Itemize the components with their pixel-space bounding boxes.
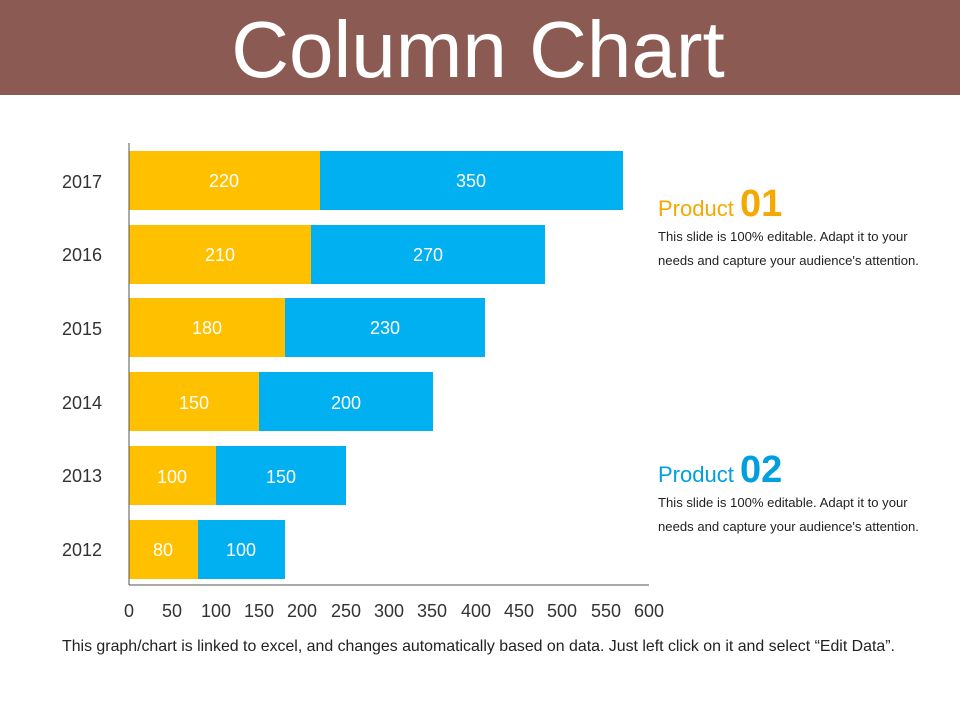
x axis labels: 100 <box>201 601 231 621</box>
bars 2016: 270 <box>413 245 443 265</box>
x axis labels: 0 <box>124 601 134 621</box>
year labels: 2016 <box>62 245 102 265</box>
product 01 text: needs and capture your audience's attention. <box>658 253 919 268</box>
bars 2017: 350 <box>456 171 486 191</box>
x axis labels: 600 <box>634 601 664 621</box>
x axis labels: 150 <box>244 601 274 621</box>
title bar <box>0 0 960 95</box>
bars 2012 <box>129 520 285 579</box>
x axis labels: 500 <box>547 601 577 621</box>
bars 2012: 80 <box>153 540 173 560</box>
x axis labels: 200 <box>287 601 317 621</box>
bars 2015: 180 <box>192 318 222 338</box>
product 02 text: This slide is 100% editable. Adapt it to your <box>658 495 908 510</box>
bars 2014: 200 <box>331 393 361 413</box>
year labels: 2017 <box>62 172 102 192</box>
bars 2017 <box>129 151 623 210</box>
product 01 text <box>658 183 919 268</box>
product 02 text: needs and capture your audience's attention. <box>658 519 919 534</box>
product 01 text: This slide is 100% editable. Adapt it to your <box>658 229 908 244</box>
bars 2017: 220 <box>209 171 239 191</box>
x axis labels: 550 <box>591 601 621 621</box>
bars 2012: 100 <box>226 540 256 560</box>
x axis labels: 50 <box>162 601 182 621</box>
x axis labels: 350 <box>417 601 447 621</box>
bars 2013: 100 <box>157 467 187 487</box>
footer note: This graph/chart is linked to excel, and changes automatically based on data. Just left click on it and select “Edit Data”. <box>62 638 895 655</box>
year labels: 2012 <box>62 540 102 560</box>
bars 2015 <box>129 298 485 357</box>
x axis labels <box>124 601 664 621</box>
year labels: 2014 <box>62 393 102 413</box>
year labels <box>62 172 102 560</box>
product 02 text: Product 02 <box>658 449 782 491</box>
x axis labels: 300 <box>374 601 404 621</box>
x axis labels: 400 <box>461 601 491 621</box>
x axis labels: 250 <box>331 601 361 621</box>
bars 2013 <box>129 446 346 505</box>
product 01 text: Product 01 <box>658 183 782 225</box>
x axis labels: 450 <box>504 601 534 621</box>
bars 2016 <box>129 225 545 284</box>
bars 2016: 210 <box>205 245 235 265</box>
year labels: 2015 <box>62 319 102 339</box>
product 02 text <box>658 449 919 534</box>
bars 2015: 230 <box>370 318 400 338</box>
bars 2014 <box>129 372 433 431</box>
year labels: 2013 <box>62 466 102 486</box>
title bar: Column Chart <box>231 5 725 94</box>
bars 2013: 150 <box>266 467 296 487</box>
bars 2014: 150 <box>179 393 209 413</box>
